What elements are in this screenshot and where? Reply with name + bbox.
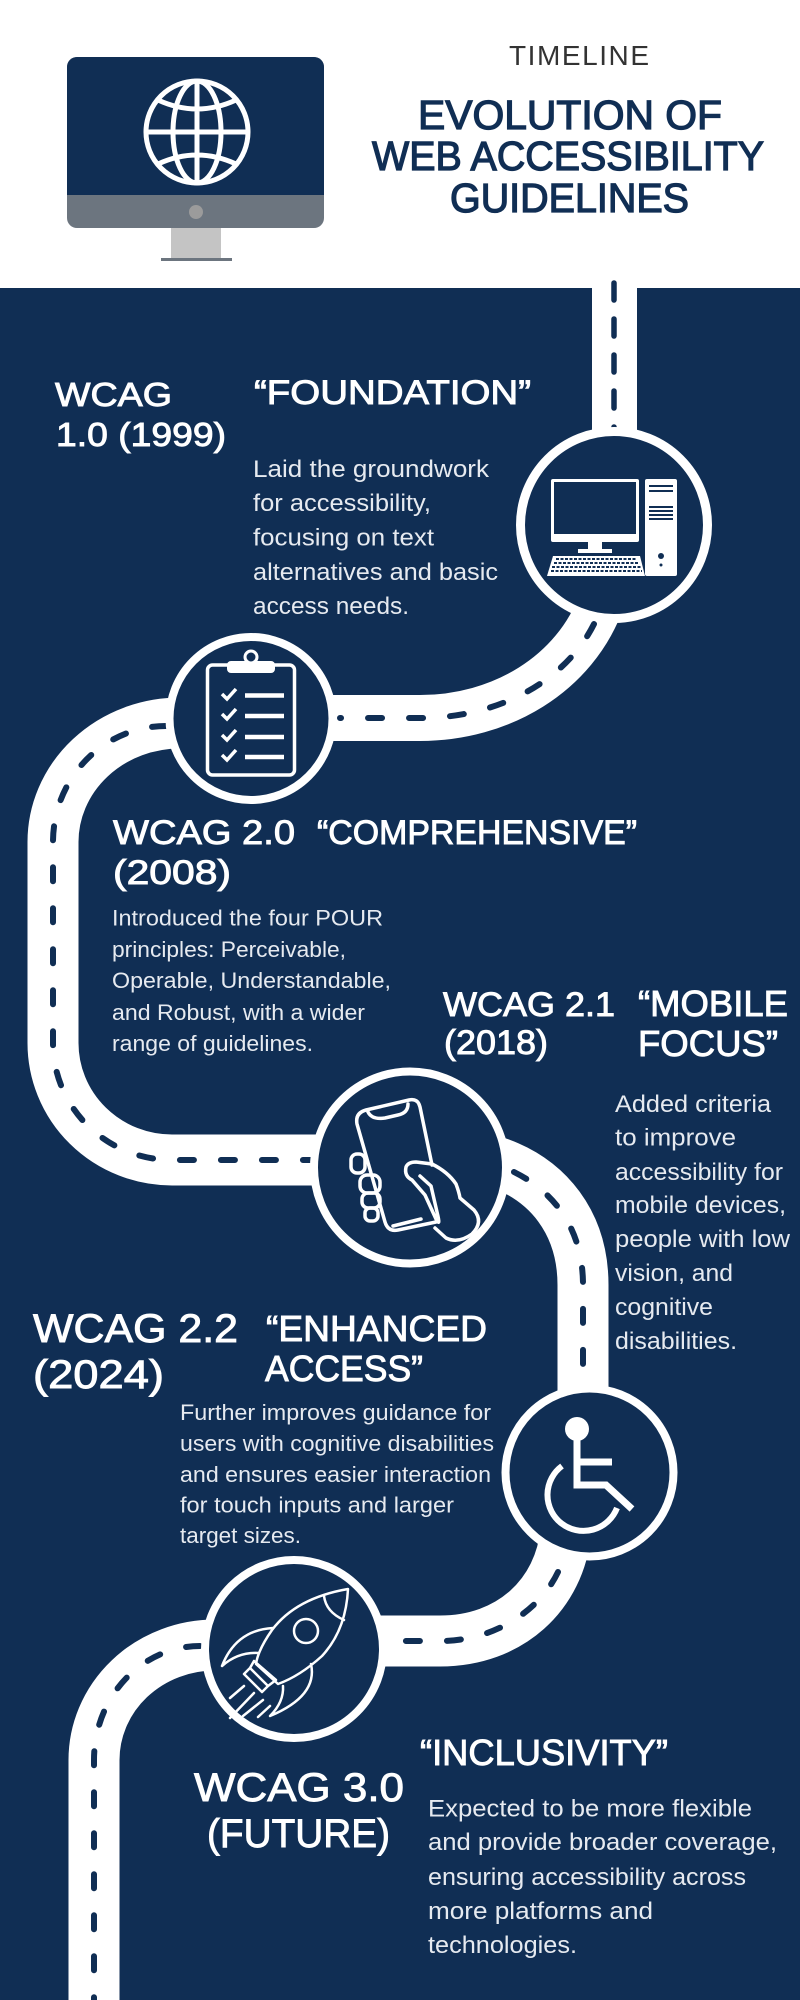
- stop 2: clipboard icon: [170, 637, 332, 800]
- heading: WCAG 2.0 (2008): [113, 814, 295, 892]
- road: fourth stop to fifth stop: [370, 1530, 566, 1641]
- title: WEB ACCESSIBILITY: [372, 133, 764, 179]
- text: WCAG 2.2 description: and ensures easier interaction: [180, 1462, 491, 1487]
- heading: WCAG 3.0 (future): (FUTURE): [207, 1812, 390, 1856]
- stop 3: hand holding phone icon: [314, 1072, 506, 1264]
- road: first stop to second stop: [330, 600, 602, 718]
- heading: enhanced access: ACCESS”: [265, 1348, 423, 1389]
- heading: enhanced access: “ENHANCED: [266, 1308, 487, 1349]
- text: WCAG 2.1 description: [615, 1091, 791, 1355]
- text: WCAG 2.1 description: disabilities.: [615, 1328, 737, 1355]
- heading: foundation: “FOUNDATION”: [254, 374, 531, 412]
- heading: WCAG 3.0 (future): WCAG 3.0: [194, 1766, 404, 1810]
- text: WCAG 2.1 description: accessibility for: [615, 1159, 783, 1186]
- text: WCAG 3.0 description: ensuring accessibility across: [428, 1864, 746, 1891]
- road: third stop to fourth stop: [490, 1160, 583, 1410]
- text: WCAG 2.1 description: Added criteria: [615, 1091, 772, 1118]
- text: WCAG 2.1 description: people with low: [615, 1226, 791, 1253]
- text: WCAG 2.1 description: mobile devices,: [615, 1192, 786, 1219]
- heading: comprehensive: “COMPREHENSIVE”: [317, 814, 637, 852]
- heading: WCAG 2.2 (2024): [33, 1307, 238, 1397]
- road: second stop to third stop: [53, 723, 330, 1160]
- text: WCAG 2.2 description: target sizes.: [180, 1523, 301, 1548]
- heading: WCAG 1.0 (1999): [55, 376, 226, 453]
- label: timeline: TIMELINE: [509, 40, 649, 71]
- text: WCAG 3.0 description: technologies.: [428, 1932, 577, 1959]
- text: WCAG 3.0 description: more platforms and: [428, 1898, 653, 1925]
- text: WCAG 2.0 description: range of guidelines.: [112, 1031, 313, 1056]
- heading: WCAG 1.0 (1999): 1.0 (1999): [56, 416, 226, 453]
- text: WCAG 3.0 description: Expected to be more flexible: [428, 1796, 752, 1822]
- text: WCAG 2.2 description: for touch inputs and larger: [180, 1492, 454, 1518]
- title: EVOLUTION OF: [418, 92, 722, 138]
- text: WCAG 2.0 description: [112, 906, 391, 1056]
- stop 5: rocket icon: [205, 1560, 383, 1738]
- heading: WCAG 2.1 (2018): [443, 986, 615, 1062]
- text: WCAG 2.2 description: [180, 1400, 494, 1548]
- heading: WCAG 2.2 (2024): WCAG 2.2: [33, 1307, 238, 1351]
- heading: WCAG 1.0 (1999): WCAG: [55, 376, 172, 413]
- header background: [0, 0, 800, 288]
- heading: WCAG 3.0 (future): [194, 1766, 404, 1856]
- text: WCAG 2.1 description: to improve: [615, 1124, 736, 1152]
- heading: WCAG 2.1 (2018): WCAG 2.1: [443, 986, 615, 1024]
- text: WCAG 2.0 description: Operable, Understandable,: [112, 968, 391, 993]
- heading: WCAG 2.0 (2008): (2008): [113, 854, 231, 892]
- heading: WCAG 2.2 (2024): (2024): [33, 1353, 164, 1397]
- heading: enhanced access: [265, 1308, 487, 1389]
- text: WCAG 1.0 description: [253, 456, 498, 620]
- text: WCAG 1.0 description: focusing on text: [253, 524, 434, 552]
- text: WCAG 1.0 description: access needs.: [253, 593, 409, 620]
- title: [372, 92, 764, 221]
- title: GUIDELINES: [450, 175, 689, 221]
- text: WCAG 1.0 description: Laid the groundwork: [253, 456, 490, 483]
- heading: WCAG 2.0 (2008): WCAG 2.0: [113, 814, 295, 852]
- text: WCAG 2.1 description: vision, and: [615, 1260, 733, 1287]
- stop 4: wheelchair icon: [506, 1388, 674, 1556]
- road: fifth stop to page bottom: [94, 1645, 215, 2000]
- stop 1: computer icon: [520, 432, 708, 618]
- road: top segment from header to first stop: [592, 283, 637, 440]
- text: WCAG 2.2 description: users with cognitive disabilities: [180, 1431, 494, 1456]
- icon: desktop monitor with globe: [67, 57, 324, 261]
- text: WCAG 2.2 description: Further improves guidance for: [180, 1400, 491, 1425]
- text: WCAG 2.0 description: Introduced the four POUR: [112, 906, 383, 930]
- text: WCAG 3.0 description: and provide broader coverage,: [428, 1829, 777, 1856]
- text: WCAG 1.0 description: alternatives and basic: [253, 559, 498, 586]
- heading: mobile focus: FOCUS”: [638, 1023, 778, 1064]
- heading: inclusivity: “INCLUSIVITY”: [420, 1732, 668, 1773]
- text: WCAG 3.0 description: [428, 1796, 777, 1959]
- heading: mobile focus: [638, 983, 788, 1064]
- heading: WCAG 2.1 (2018): (2018): [444, 1024, 548, 1062]
- text: WCAG 1.0 description: for accessibility,: [253, 490, 431, 517]
- text: WCAG 2.1 description: cognitive: [615, 1294, 713, 1321]
- text: WCAG 2.0 description: principles: Perceivable,: [112, 937, 346, 962]
- text: WCAG 2.0 description: and Robust, with a wider: [112, 1000, 365, 1025]
- heading: mobile focus: “MOBILE: [638, 983, 788, 1024]
